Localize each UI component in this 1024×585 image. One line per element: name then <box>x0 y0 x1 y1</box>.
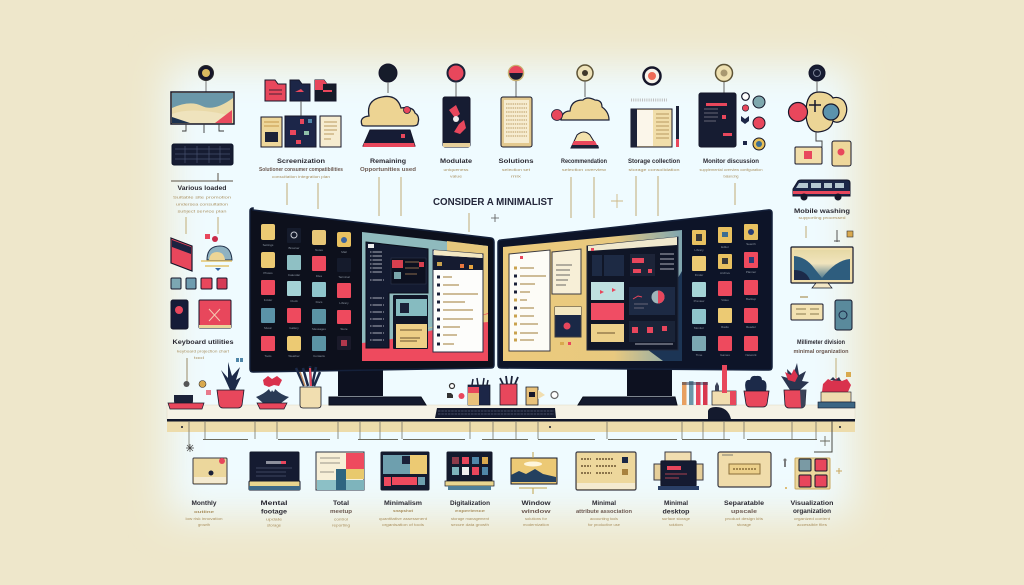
window: sidebar file list <box>366 242 428 348</box>
text: mobile washing: supporting processed <box>798 216 846 220</box>
bottom item 8: minimal desktop: Minimal <box>664 500 688 507</box>
monitor body left <box>250 208 494 372</box>
icon column: monitor and keyboard <box>171 66 234 165</box>
bottom item 8: minimal desktop: solutions <box>669 523 683 527</box>
bottom item 2: mental footage: storage <box>267 524 281 528</box>
bottom item 3: total meetup: meetup <box>330 509 353 515</box>
bottom item 2: mental footage: update <box>266 518 282 522</box>
icon: dashboard tablet <box>381 452 429 490</box>
bottom item 5: digitalization: Digitalization <box>450 500 490 507</box>
icon: open book with pen <box>631 68 679 147</box>
text: screenization: Solutioner consumer compatibilities <box>259 167 343 173</box>
bottom item 2: mental footage: footage <box>261 508 287 516</box>
bottom item 7: minimal association: Minimal <box>592 500 616 507</box>
dashboard: colored cards <box>591 282 624 342</box>
window: white list <box>433 250 483 352</box>
icon: control card <box>576 452 636 490</box>
bottom item 4: minimalism: organisation of tools <box>382 523 424 527</box>
text: keyboard utilities <box>172 339 243 382</box>
monitor stand right <box>578 368 677 405</box>
text: monitor discussion <box>700 158 762 205</box>
app icons right: Video <box>721 298 729 302</box>
monitor body right <box>498 210 772 370</box>
text: screenization: Screenization <box>277 158 325 165</box>
text: screenization <box>259 158 343 209</box>
dashboard: bottom panel <box>629 321 675 344</box>
app icons left: Notes <box>315 248 323 252</box>
text: monitor discussion: supplemental overview configuration <box>700 168 762 172</box>
bottom item 7: minimal association: accounting tools <box>590 517 618 521</box>
markers <box>682 381 708 405</box>
text: solutions: Solutions <box>498 158 534 165</box>
icon: cloud over tablet <box>361 64 419 147</box>
bottom item 10: visualization <box>784 458 842 527</box>
connector ticks near title <box>469 213 499 232</box>
icon: cream device <box>718 452 771 487</box>
bottom item 9: separatable: Separatable <box>724 500 764 507</box>
bottom item 7: minimal association <box>576 452 636 527</box>
text: keyboard utilities: tool <box>194 356 204 360</box>
text: storage: storage consolidation <box>628 168 680 172</box>
bottom item 3: total meetup: reporting <box>332 524 350 528</box>
text: monitor discussion: balancing <box>724 174 738 178</box>
text: millimeter division <box>794 339 848 378</box>
app icons right: Backup <box>746 297 756 301</box>
icon: landscape monitor <box>791 247 853 288</box>
app icons right: Games <box>720 353 730 357</box>
potted plant 1 <box>217 362 244 408</box>
bottom item 10: visualization: organization <box>793 508 831 515</box>
app icons left: Calendar <box>288 273 300 277</box>
icons: folders and cards <box>261 80 341 147</box>
bottom item 5: digitalization: storage management <box>451 517 490 521</box>
app icons right: Network <box>745 353 757 357</box>
desk keyboard <box>435 408 556 418</box>
app icons right: Preview <box>694 299 705 303</box>
app icons right: Editor <box>721 245 729 249</box>
app icons left <box>261 224 351 358</box>
text: keyboard utilities: Keyboard utilities <box>172 339 234 346</box>
icon: phone <box>443 64 470 147</box>
dashboard: pie chart panel <box>629 287 675 315</box>
main dark dashboard window <box>587 237 678 350</box>
text: screenization: consultation integration plan <box>272 175 330 179</box>
app icons left: Mail <box>341 250 347 254</box>
bottom item 1: monthly: Monthly <box>192 500 217 507</box>
icon: app tile grid <box>784 458 842 489</box>
app icons left: Files <box>316 274 323 278</box>
text: storage <box>611 158 680 216</box>
text: left upper block: subject service plan <box>178 210 226 214</box>
desk items left <box>168 362 558 409</box>
text: mobile washing: Mobile washing <box>794 208 850 215</box>
bottom item 6: window: window <box>520 509 552 515</box>
app icons right: Planner <box>746 270 756 274</box>
icon: laptop <box>249 452 300 490</box>
app icons right: Monitor <box>694 326 704 330</box>
app icons left: Messages <box>312 327 326 331</box>
potted plant 2 <box>744 376 769 407</box>
right monitor <box>498 210 772 405</box>
app icons right: Finder <box>695 273 703 277</box>
text: modulate: value <box>450 174 462 178</box>
text: modulate: uniqueness <box>444 168 469 172</box>
organizer cup <box>468 378 490 405</box>
text: recommendation <box>561 158 607 218</box>
flower plant in bowl <box>256 376 289 409</box>
app icons left: Clock <box>290 299 298 303</box>
app icons right: Time <box>696 353 703 357</box>
app icons left: Settings <box>263 243 274 247</box>
text: left upper block <box>171 173 233 234</box>
app icons left: Gallery <box>289 326 299 330</box>
bottom item 4: minimalism: quantitative assessment <box>379 517 428 521</box>
app icons left: Music <box>264 326 272 330</box>
icon: colour grid <box>316 452 364 490</box>
pencil cup <box>296 366 321 408</box>
bottom item 1: monthly: low risk innovation <box>186 517 222 521</box>
app icons right: Archive <box>720 271 730 275</box>
bottom item 10: visualization: Visualization <box>790 500 834 507</box>
red pen cup <box>500 376 518 405</box>
text: recommendation: selection overview <box>562 168 606 172</box>
bottom item 4: minimalism: Minimalism <box>384 500 422 507</box>
app icons left: Tools <box>264 354 272 358</box>
text: monitor discussion: Monitor discussion <box>703 158 759 165</box>
title: CONSIDER A MINIMALIST <box>433 197 553 208</box>
text: recommendation: Recommendation <box>561 158 607 165</box>
bottom item 10: visualization: accessible files <box>797 523 827 527</box>
text: keyboard utilities: keyboard projection chart <box>177 350 230 354</box>
bottom item 6: window <box>511 452 557 527</box>
app icons right: Reader <box>746 325 756 329</box>
potted plant 3 <box>781 363 809 408</box>
flower box on books <box>818 372 855 408</box>
coffee cup <box>168 380 211 409</box>
desk items right <box>682 363 855 408</box>
app icons left: Library <box>339 301 349 305</box>
icon: laptop with tiles <box>445 452 494 490</box>
bottom item 3: total meetup <box>316 452 364 528</box>
bottom item 6: window: Window <box>522 500 551 507</box>
bottom item 9: separatable <box>718 452 771 527</box>
icon: printer dock <box>654 452 703 490</box>
bottom item 6: window: solutions for <box>525 517 548 521</box>
bottom item 8: minimal desktop: desktop <box>662 508 690 516</box>
app icons left: Weather <box>288 354 300 358</box>
bottom item 7: minimal association: attribute association <box>576 509 632 515</box>
app icons left: Docs <box>316 300 323 304</box>
bottom item 5: digitalization: experience <box>455 509 485 513</box>
left monitor <box>250 208 494 405</box>
text: modulate: Modulate <box>440 158 473 165</box>
app icons right: Radio <box>721 325 729 329</box>
text: remaining: Remaining <box>370 158 406 165</box>
text: solutions: mix <box>511 174 521 178</box>
bottom item 8: minimal desktop: surface storage <box>662 517 690 521</box>
icons: left column devices <box>171 234 232 329</box>
bottom item 2: mental footage: Mental <box>260 500 288 507</box>
bottom item 6: window: modernization <box>523 523 549 527</box>
text: mobile washing <box>794 208 853 242</box>
text: modulate <box>440 158 473 178</box>
bottom item 9: separatable: upscale <box>731 509 757 515</box>
text: solutions <box>498 158 534 178</box>
bottom item 4: minimalism: snapshot <box>393 509 414 513</box>
icon: e-reader tablet <box>501 66 532 147</box>
text: left upper block: Various loaded <box>178 185 227 192</box>
pen holder <box>712 365 736 405</box>
text: storage: Storage collection <box>628 158 680 165</box>
small dark window <box>555 307 581 345</box>
bottom item 3: total meetup: Total <box>333 500 349 507</box>
bottom item 1: monthly: growth <box>198 523 210 527</box>
bottom item 4: minimalism <box>379 452 429 527</box>
bottom item 1: monthly: outline <box>194 510 214 514</box>
bottom item 5: digitalization <box>445 452 494 527</box>
bottom item 3: total meetup: control <box>334 518 348 522</box>
bottom item 10: visualization: organized content <box>794 517 831 521</box>
bottom item 2: mental footage <box>249 452 300 528</box>
text: solutions: selection set <box>502 168 531 172</box>
dashboard: top panels <box>592 254 674 276</box>
bottom item 9: separatable: storage <box>737 523 751 527</box>
app icons left: Store <box>340 327 348 331</box>
monitor stand left <box>329 368 426 405</box>
icons: card and phone <box>791 297 852 330</box>
icon: yellow card <box>193 458 227 484</box>
text: left upper block: Suitable site promotion <box>173 196 231 200</box>
bottom item 7: minimal association: for productive use <box>588 523 620 527</box>
wallpaper right <box>503 230 682 361</box>
app icons left: Terminal <box>338 275 350 279</box>
text: millimeter division: minimal organization <box>794 349 848 355</box>
wallpaper left <box>362 232 488 361</box>
app icons left: Photos <box>263 271 273 275</box>
window: white list right <box>509 250 550 351</box>
app icons right <box>692 224 758 357</box>
icon: landscape window <box>511 452 557 494</box>
desk clip icons <box>526 387 558 405</box>
note card <box>552 249 581 294</box>
icon: circle cluster <box>788 65 851 166</box>
app icons right: Search <box>746 242 756 246</box>
bottom item 8: minimal desktop <box>654 452 703 527</box>
bottom item 5: digitalization: secure data growth <box>451 523 489 527</box>
app icons left: Contacts <box>313 354 325 358</box>
text: remaining <box>360 158 416 216</box>
icon: dark tablet with side badges <box>699 64 765 150</box>
window: preview cards <box>393 295 428 349</box>
app icons right: Library <box>694 248 704 252</box>
small desk icons <box>447 384 464 399</box>
bottom item 1: monthly <box>186 458 227 527</box>
mouse <box>708 407 731 419</box>
app icons left: Browser <box>288 246 300 250</box>
icon: cloud small <box>552 65 609 148</box>
desk <box>167 405 855 452</box>
app icons left: Folder <box>264 298 272 302</box>
icon: van <box>793 180 850 200</box>
bottom item 9: separatable: product design kits <box>725 517 763 521</box>
text: remaining: Opportunities used <box>360 167 416 173</box>
text: left upper block: undersea consultation <box>176 202 228 206</box>
text: millimeter division: Millimeter division <box>797 339 845 346</box>
